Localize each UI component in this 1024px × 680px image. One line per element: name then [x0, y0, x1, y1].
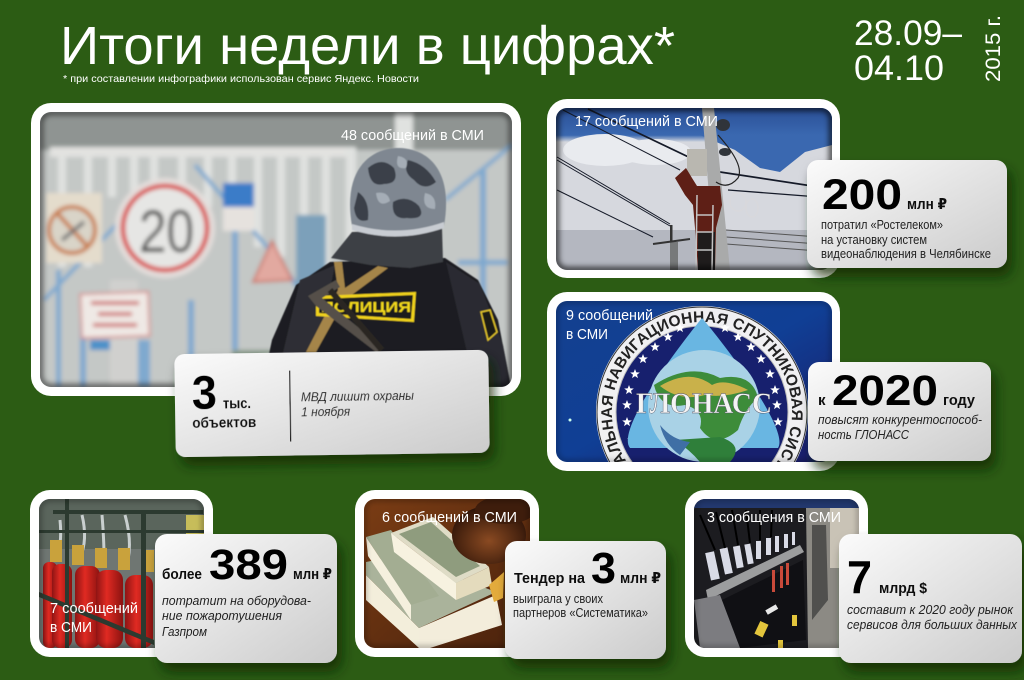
figure [162, 541, 332, 589]
gavel [452, 506, 526, 564]
drive bays [705, 532, 795, 581]
card: 389 million [155, 534, 337, 663]
card: by 2020 [808, 362, 991, 461]
speed limit sign [115, 178, 215, 278]
date range: 04.10 [854, 49, 944, 88]
photo: GLONASS emblem: ГЛОБАЛЬНАЯ НАВИГАЦИОННАЯ СПУТНИКОВАЯ СИСТЕМА [601, 311, 803, 462]
globe [648, 350, 760, 462]
card: 7 billion [839, 534, 1022, 663]
caption: 3 messages: 3 сообщения в СМИ [707, 509, 841, 526]
description: на установку систем [821, 232, 927, 247]
figure: к [818, 392, 826, 409]
figure: 3 [591, 544, 616, 593]
figure [847, 551, 928, 603]
ladder [696, 195, 713, 270]
description: МВД лишит охраны [301, 388, 414, 404]
panel: Rostelecom video surveillance [547, 99, 1007, 278]
caption: 6 messages: 6 сообщений в СМИ [382, 509, 517, 526]
title: Итоги недели в цифрах* [60, 16, 675, 76]
figure: более [162, 566, 202, 583]
photo: worker on pole [556, 108, 832, 270]
description: Газпром [162, 624, 207, 639]
description: 1 ноября [301, 404, 350, 419]
unit: млн ₽ [907, 196, 947, 213]
police badge label [316, 292, 416, 322]
photo: GLONASS emblem [556, 301, 832, 462]
panel: security objects [31, 103, 521, 457]
panel: Sistematika tender [355, 490, 666, 659]
cylinders [43, 562, 153, 648]
description: выиграла у своих [513, 591, 603, 606]
caption: 7 messages: в СМИ [50, 619, 92, 636]
cameras [716, 119, 731, 156]
figure [514, 544, 661, 593]
rack frame [39, 499, 204, 648]
caption: 17 messages: 17 сообщений в СМИ [575, 113, 718, 130]
description [818, 412, 983, 442]
photo: server rack [694, 499, 859, 648]
figure: 7 [847, 551, 872, 603]
figure: 3 [191, 366, 217, 419]
description: ние пожаротушения [162, 608, 282, 623]
caption: 9 messages: в СМИ [566, 326, 608, 343]
description: потратил «Ростелеком» [821, 217, 943, 232]
description [301, 388, 415, 419]
panel: Gazprom fire equipment [30, 490, 337, 663]
description [847, 602, 1017, 632]
caption: 48 messages: 48 сообщений в СМИ [341, 127, 484, 144]
caption: 9 messages [566, 307, 653, 343]
money stacks [366, 575, 419, 648]
no smoking sign [46, 193, 102, 263]
photo: police officer at fence [40, 112, 512, 387]
object label: объектов [192, 414, 256, 432]
unit: тыс. [223, 395, 251, 412]
caption: 7 messages [50, 600, 138, 636]
description [162, 593, 312, 639]
figure [818, 367, 976, 415]
red text plate [80, 292, 150, 338]
photo: red fire cylinders [39, 499, 204, 648]
description [513, 591, 648, 620]
photo: police officer at fence: 20 [139, 198, 194, 265]
figure: 2020 [832, 367, 938, 415]
GLONASS wordmark: ГЛОНАСС [636, 387, 772, 420]
year: 2015 г. [982, 15, 1005, 82]
card: 200 million [807, 160, 1007, 268]
utility pole [702, 108, 730, 270]
worker [675, 168, 722, 270]
description: партнеров «Систематика» [513, 605, 648, 620]
description [821, 217, 991, 261]
figure: Тендер на [514, 570, 586, 587]
figure: млн ₽ [293, 566, 332, 583]
panel: GLONASS [547, 292, 1000, 474]
description: составит к 2020 году рынок [847, 602, 1014, 617]
small pole [670, 242, 678, 270]
figure: 389 [209, 541, 288, 589]
description: ность ГЛОНАСС [818, 427, 910, 442]
figure: 200 [822, 171, 902, 219]
description: повысят конкурентоспособ- [818, 412, 983, 427]
caption: 7 messages: 7 сообщений [50, 600, 138, 617]
description: потратит на оборудова- [162, 593, 312, 608]
date range: 28.09– [854, 14, 963, 53]
card: 3 thousand objects [174, 350, 490, 457]
date range [854, 14, 963, 88]
figure: году [943, 392, 976, 409]
card: 3 million tender [505, 541, 666, 659]
caption: 9 messages: 9 сообщений [566, 307, 653, 324]
photo: money and gavel [364, 496, 535, 648]
figure: млн ₽ [620, 570, 661, 587]
police officer [262, 148, 511, 387]
description: видеонаблюдения в Челябинске [821, 246, 991, 261]
blue info sign [223, 183, 254, 207]
warning triangle [253, 241, 292, 282]
footnote: * при составлении инфографики использован сервис Яндекс. Новости [63, 73, 419, 85]
panel: big data market [685, 490, 1022, 663]
header [60, 14, 1005, 88]
wifi antennas [730, 193, 758, 217]
police badge label: ПОЛИЦИЯ [321, 299, 411, 316]
figure: млрд $ [879, 580, 928, 597]
